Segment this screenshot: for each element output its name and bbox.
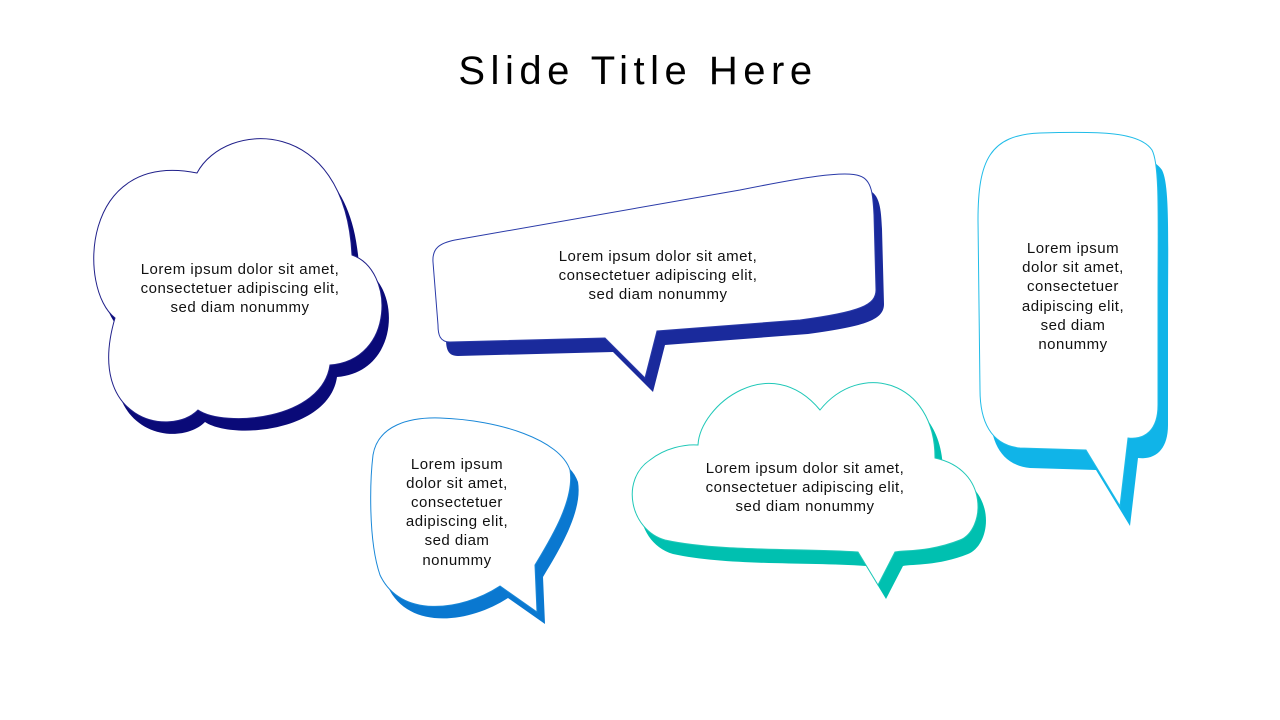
panel: speech bubble 6 [978,132,1168,526]
text: bubble 6: dolor sit amet, [1022,259,1124,276]
text: cloud 1: consectetuer adipiscing elit, [141,280,339,297]
text: bubble 6: nonummy [1038,336,1108,353]
text: bubble 3: adipiscing elit, [406,513,508,530]
panel: speech bubble 3 [371,418,579,624]
text: cloud 5: sed diam nonummy [736,498,874,515]
text: bubble 3: dolor sit amet, [406,475,508,492]
panel: cloud 1 [94,139,389,434]
text: cloud 5: consectetuer adipiscing elit, [706,479,904,496]
text: bubble 6: Lorem ipsum [1027,240,1119,257]
text: bubble 2: sed diam nonummy [589,286,727,303]
text: bubble 6: consectetuer [1027,278,1119,295]
text: bubble 3: sed diam [425,532,489,549]
text: bubble 6: sed diam [1041,317,1105,334]
text: cloud 5: Lorem ipsum dolor sit amet, [706,460,904,477]
panel: cloud speech bubble 5 [632,383,986,599]
text: bubble 6: adipiscing elit, [1022,298,1124,315]
text: bubble 2: consectetuer adipiscing elit, [559,267,757,284]
text: bubble 3: consectetuer [411,494,503,511]
text: bubble 3: Lorem ipsum [411,456,503,473]
text: bubble 3: nonummy [422,552,492,569]
panel: speech bubble 2 [433,174,884,392]
title: Slide Title Here [458,49,818,93]
text: cloud 1: Lorem ipsum dolor sit amet, [141,261,339,278]
text: bubble 2: Lorem ipsum dolor sit amet, [559,248,757,265]
text: cloud 1: sed diam nonummy [171,299,309,316]
